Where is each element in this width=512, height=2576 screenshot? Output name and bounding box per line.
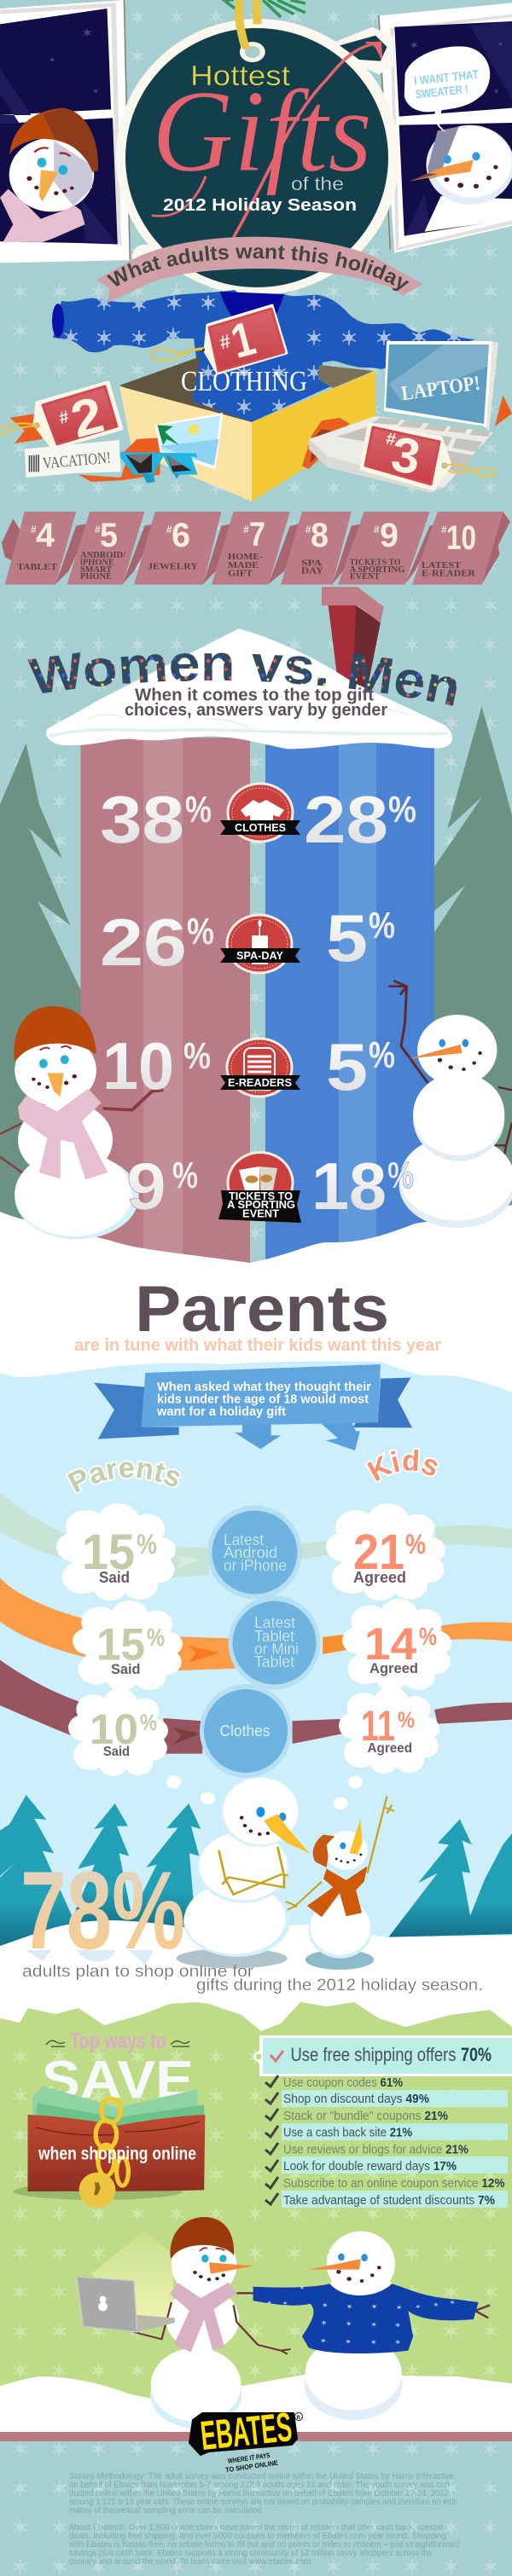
curved label: Parents: Parents xyxy=(65,1460,181,1495)
stat row: e-readers: % xyxy=(369,1034,395,1076)
laptop base xyxy=(309,416,493,488)
tag #1 xyxy=(152,305,287,373)
parents 10% said, clothes: % xyxy=(140,1710,157,1735)
left snowman head xyxy=(9,108,98,211)
rank numbers: 8 xyxy=(311,517,329,554)
badge: tickets: A SPORTING xyxy=(227,1199,295,1211)
stat row: spa day: 5 xyxy=(326,900,368,975)
stat row: e-readers: 5 xyxy=(326,1029,368,1104)
rank numbers xyxy=(31,516,476,557)
about Ebates text xyxy=(68,2523,460,2567)
cash xyxy=(32,2087,198,2126)
stat row: spa day: % xyxy=(187,911,214,952)
stat row: clothes: 28 xyxy=(304,782,388,857)
78 percent stat: 78% xyxy=(20,1848,185,1972)
tip rows: Subscribe to an online coupon service 12% xyxy=(283,2176,505,2191)
right snowman xyxy=(410,125,512,232)
kids 11% agreed, clothes: % xyxy=(398,1707,415,1733)
blue sweater xyxy=(52,290,475,422)
chain xyxy=(96,2098,128,2185)
stat row: clothes: % xyxy=(388,789,416,831)
answer bubble: Latest Android or iPhone: Android xyxy=(224,1544,277,1561)
rank labels: TABLET xyxy=(17,562,58,572)
rank labels: HOME- xyxy=(228,552,263,562)
survey methodology text: Survey Methodology: The adult survey was conducted online within the United States by Harris Interactive xyxy=(69,2472,454,2481)
answer bubble: Clothes: Clothes xyxy=(220,1722,270,1740)
badge: spa day: SPA-DAY xyxy=(236,949,283,962)
title: 2012 Holiday Season: 2012 Holiday Season xyxy=(163,196,357,215)
left window with snowman xyxy=(0,0,130,263)
rank labels: iPHONE xyxy=(80,558,114,568)
woman snowman xyxy=(0,1006,163,1239)
snowman with laptop xyxy=(77,2217,291,2428)
subheading: parents: are in tune with what their kids want this year xyxy=(74,1336,441,1355)
rank numbers: # xyxy=(95,524,101,535)
parents 10% said, clothes: 10 xyxy=(90,1705,138,1753)
rank numbers: # xyxy=(166,524,172,535)
laptop label: LAPTOP! xyxy=(400,373,481,405)
survey methodology text xyxy=(69,2472,458,2515)
subheading: gender: When it comes to the top gift xyxy=(135,686,374,704)
rank labels: TICKETS TO xyxy=(350,558,401,568)
kids 21% agreed, android: 21 xyxy=(353,1525,404,1580)
teal trees xyxy=(0,1795,512,1947)
stat row: tickets: 9 xyxy=(126,1149,166,1224)
alternate row bands xyxy=(282,2090,508,2208)
flow ribbons xyxy=(0,1492,512,1754)
clothing label: CLOTHING xyxy=(181,366,307,397)
kids 21% agreed, android xyxy=(326,1503,445,1601)
answer bubble: Latest Android or iPhone: or iPhone xyxy=(224,1557,287,1574)
scarf xyxy=(170,2283,236,2352)
heading: Women vs. Men xyxy=(27,652,457,706)
survey methodology text: ducted online within the United States by Harris Interactive on behalf of Ebates from October 17-24, 2012 xyxy=(69,2489,449,2498)
blue banner: kids under the age of 18 would most xyxy=(157,1393,369,1407)
tag #1: 1 xyxy=(225,310,260,368)
title: Gifts xyxy=(152,43,381,237)
stat row: tickets: % xyxy=(387,1155,414,1196)
title: Gifts: Gifts xyxy=(152,66,372,196)
blue banner: want for a holiday gift xyxy=(156,1405,286,1419)
parents 15% said, tablet: 15 xyxy=(96,1620,145,1670)
rank labels: SMART xyxy=(80,564,113,575)
78 percent caption: adults plan to shop online for xyxy=(22,1963,254,1981)
tip rows: Shop on discount days 49% xyxy=(283,2092,429,2106)
survey methodology text: among 1,121 8-18 year olds. These online surveys are not based on probability samples and therefore no esti- xyxy=(69,2498,458,2507)
kids 21% agreed, android: Agreed xyxy=(353,1569,406,1586)
tag #2: # xyxy=(57,408,71,428)
small snowman xyxy=(286,1797,394,1959)
pink women column xyxy=(80,738,250,1266)
tag #2: 2 xyxy=(65,385,109,449)
tag body xyxy=(116,19,399,295)
chimney xyxy=(322,587,384,697)
curved label: Parents xyxy=(65,1460,181,1495)
tag #3: 3 xyxy=(388,426,423,485)
orange ribbon xyxy=(0,1577,512,1670)
subheading: gender: choices, answers vary by gender xyxy=(125,701,387,720)
top ways to heading: Top ways to xyxy=(70,2028,166,2053)
big snowman xyxy=(183,1777,310,1957)
tip rows xyxy=(283,2075,505,2208)
parents 15% said, tablet: % xyxy=(147,1624,165,1652)
rank labels: A SPORTING xyxy=(350,564,405,575)
tag ears xyxy=(333,27,393,74)
parents 15% said, android: 15 xyxy=(82,1525,135,1580)
rank labels: E-READER xyxy=(422,568,476,578)
78 percent caption xyxy=(22,1963,483,1994)
tip rows: Look for double reward days 17% xyxy=(283,2159,457,2174)
green save panel xyxy=(0,2002,512,2439)
parents 10% said, clothes xyxy=(68,1688,168,1776)
about Ebates text: with Ebates is hassle-free: no rebate forms to fill out and no points or miles to redeem – just straightforward xyxy=(68,2540,460,2550)
thought puffs xyxy=(166,1775,363,1809)
tip highlight: free shipping xyxy=(254,2035,512,2076)
rank labels: DAY xyxy=(301,566,323,576)
lock xyxy=(79,2173,115,2208)
stat row: spa day xyxy=(100,900,395,980)
pine trees behind columns xyxy=(0,706,512,1222)
parents 10% said, clothes: Said xyxy=(103,1745,130,1759)
tag #2 xyxy=(0,382,122,452)
answer bubble: Latest Android or iPhone xyxy=(207,1506,302,1600)
answer bubble: Clothes xyxy=(200,1684,292,1778)
ribbon: ranks 4 to 10 xyxy=(2,512,510,585)
two snowmen illustration xyxy=(177,1777,394,1970)
rank numbers: 4 xyxy=(36,517,55,554)
bottom snow xyxy=(0,2375,512,2439)
heading: Parents: Parents xyxy=(135,1273,389,1346)
answer bubble: Latest Android or iPhone: Latest xyxy=(224,1531,264,1548)
maroon ribbon xyxy=(0,1660,512,1754)
wallet with chain and lock xyxy=(13,2087,205,2208)
kids 14% agreed, tablet: 14 xyxy=(364,1619,417,1670)
kids 11% agreed, clothes: Agreed xyxy=(367,1741,412,1756)
answer bubble: Latest Tablet or Mini Tablet: Tablet xyxy=(254,1628,294,1645)
scarf xyxy=(18,1089,108,1179)
box left face xyxy=(119,386,252,501)
snow roof xyxy=(46,628,452,749)
survey methodology text: mates of theoretical sampling error can be calculated. xyxy=(69,2506,264,2515)
SAVE heading: SAVE xyxy=(42,2051,194,2110)
rope xyxy=(239,0,246,49)
stat row: tickets: 18 xyxy=(311,1149,387,1224)
kids 14% agreed, tablet: Agreed xyxy=(369,1660,418,1676)
rank labels xyxy=(17,550,476,582)
badge: spa day xyxy=(220,914,300,974)
rank labels: PHONE xyxy=(80,571,112,582)
answer bubble: Latest Tablet or Mini Tablet: Tablet xyxy=(254,1653,294,1670)
savings tips list xyxy=(254,2035,512,2208)
Ebates logo: EBATES xyxy=(199,2405,294,2459)
survey methodology text: on behalf of Ebates from November 5-7 among 2,059 adults ages 18 and older. The youth survey was con- xyxy=(69,2480,452,2490)
about Ebates text: savings plus cash back. Ebates supports a strong community of 12 million savvy shoppers across the xyxy=(69,2549,433,2558)
hat xyxy=(14,1006,96,1060)
speech bubble xyxy=(404,46,490,132)
parents 15% said, android: % xyxy=(137,1529,157,1560)
tip rows: Take advantage of student discounts 7% xyxy=(283,2193,495,2208)
kids 11% agreed, clothes: 11 xyxy=(361,1702,395,1750)
left snowman scarf xyxy=(0,189,85,242)
stat row: e-readers: % xyxy=(183,1035,211,1077)
rank numbers: 7 xyxy=(249,516,265,553)
stat row: spa day: 26 xyxy=(100,905,187,980)
ribbon folds xyxy=(2,512,510,584)
vacation card xyxy=(25,440,121,478)
title: Hottest: Hottest xyxy=(190,60,290,91)
stat row: clothes xyxy=(100,782,416,857)
man snowman xyxy=(388,981,512,1228)
ribbon panels xyxy=(5,512,503,585)
answer bubble: Latest Tablet or Mini Tablet: or Mini xyxy=(254,1641,299,1658)
rank numbers: # xyxy=(243,524,249,535)
gift box xyxy=(119,356,375,501)
wallet body xyxy=(28,2115,205,2191)
answer bubble: Latest Tablet or Mini Tablet xyxy=(229,1596,321,1690)
rank numbers: # xyxy=(374,524,380,535)
pine sprig and rope xyxy=(222,0,305,17)
rank numbers: # xyxy=(441,524,447,535)
rank labels: GIFT xyxy=(228,568,253,578)
badge: tickets: TICKETS TO xyxy=(229,1190,293,1202)
kids 21% agreed, android: % xyxy=(405,1529,426,1560)
snow ground xyxy=(0,1920,512,2046)
blue men column xyxy=(265,738,434,1266)
vacation label: VACATION! xyxy=(42,449,112,472)
heading: Women vs. Men: Women vs. Men xyxy=(27,652,457,706)
wallet caption: when shopping online xyxy=(38,2144,196,2164)
rank numbers: 10 xyxy=(446,519,476,557)
stat row: e-readers xyxy=(102,1028,395,1104)
gift tag heading xyxy=(116,0,399,295)
right window with snowman xyxy=(379,3,512,253)
blue banner xyxy=(94,1364,412,1450)
rank numbers: 9 xyxy=(380,517,399,554)
stat row: clothes: % xyxy=(185,789,212,831)
laptop xyxy=(309,341,498,493)
tip rows: Use a cash back site 21% xyxy=(283,2125,412,2140)
vacation photo and sunglasses xyxy=(25,413,223,483)
heading banner: What adults want this holiday: What adults want this holiday xyxy=(107,246,410,292)
subheading: gender xyxy=(125,686,387,720)
tip rows: Use reviews or blogs for advice 21% xyxy=(283,2142,468,2157)
tip highlight: free shipping: 70% xyxy=(461,2044,492,2065)
stat row: tickets xyxy=(126,1149,414,1224)
logo tagline: WHERE IT PAYS xyxy=(227,2452,271,2465)
rank numbers: # xyxy=(31,524,37,535)
answer bubble: Latest Tablet or Mini Tablet: Latest xyxy=(254,1614,295,1631)
badge: clothes xyxy=(220,783,300,842)
laptop xyxy=(77,2277,137,2332)
stat row: spa day: % xyxy=(369,905,395,946)
curved label: Kids: Kids xyxy=(365,1448,439,1484)
snow drift xyxy=(0,1205,512,1450)
footer panel xyxy=(0,2432,512,2576)
speech bubble text: I WANT THAT xyxy=(413,67,480,88)
check marks xyxy=(265,2075,278,2204)
rank labels: MADE xyxy=(228,560,259,570)
about Ebates text: About Ebates®: Over 1,500 online stores have joined the roster of retailers that offer cash back, special xyxy=(69,2523,443,2533)
sunglasses xyxy=(116,452,198,475)
tag #1: # xyxy=(218,330,233,353)
parents 15% said, tablet xyxy=(73,1601,183,1691)
about Ebates text: deals, including free shipping, and over 5000 coupons to members of Ebates.com year round. Shopping xyxy=(69,2532,446,2541)
blue banner: When asked what they thought their xyxy=(157,1381,371,1394)
rank numbers: 6 xyxy=(172,517,190,554)
tag #3 xyxy=(361,424,496,489)
parents 15% said, android xyxy=(56,1503,176,1601)
tip rows: Use coupon codes 61% xyxy=(283,2075,403,2090)
Ebates logo xyxy=(189,2405,302,2474)
rank numbers: # xyxy=(305,524,311,535)
orange ribbons xyxy=(9,395,512,482)
parents 15% said, tablet: Said xyxy=(111,1661,140,1677)
tip highlight: free shipping: Use free shipping offers xyxy=(290,2044,456,2065)
rank labels: LATEST xyxy=(422,560,462,570)
tag #3: # xyxy=(385,430,397,449)
kids 11% agreed, clothes xyxy=(339,1687,439,1774)
box right face xyxy=(252,371,375,501)
rank labels: SPA xyxy=(301,558,322,568)
rank labels: ANDROID/ xyxy=(80,550,126,560)
logo tagline xyxy=(224,2451,279,2474)
title: of the: of the xyxy=(291,173,344,194)
about Ebates text: country and around the world. To learn more visit www.ebates.com. xyxy=(69,2557,313,2567)
parents 15% said, android: Said xyxy=(99,1569,130,1586)
rank labels: EVENT xyxy=(350,571,381,582)
badge: tickets: EVENT xyxy=(242,1207,279,1219)
stat row: tickets: % xyxy=(172,1155,198,1196)
rank labels: JEWELRY xyxy=(148,561,198,571)
kids 14% agreed, tablet: % xyxy=(419,1624,437,1651)
Ebates logo: R xyxy=(297,2416,300,2421)
sky panel xyxy=(0,1362,512,1961)
badge: e-readers: E-READERS xyxy=(228,1076,292,1089)
speech bubble text: SWEATER ! xyxy=(415,82,468,101)
snowman with sweater xyxy=(236,2232,490,2420)
vacation photo xyxy=(155,413,223,470)
logo tagline: TO SHOP ONLINE xyxy=(225,2459,279,2474)
banner arrows xyxy=(235,1422,281,1449)
kids 14% agreed, tablet xyxy=(342,1599,451,1691)
badge: clothes: CLOTHES xyxy=(235,821,286,834)
speech bubble text xyxy=(413,67,481,101)
78 percent caption: gifts during the 2012 holiday season. xyxy=(196,1977,483,1994)
stat row: e-readers: 10 xyxy=(102,1028,174,1103)
rank numbers: 5 xyxy=(100,517,118,554)
stat row: clothes: 38 xyxy=(100,782,184,857)
badge: e-readers xyxy=(220,1037,300,1098)
green ribbon xyxy=(0,1492,512,1577)
badge: tickets xyxy=(218,1151,301,1223)
tip rows: Stack or "bundle" coupons 21% xyxy=(283,2109,448,2123)
laptop glow xyxy=(91,2232,173,2319)
